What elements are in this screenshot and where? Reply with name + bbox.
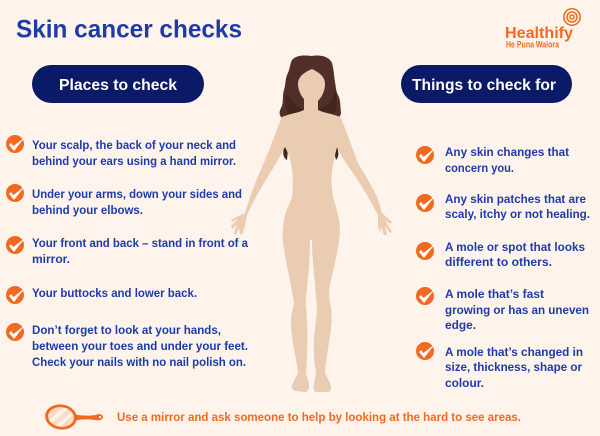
item: arms: Under your arms, down your sides and xyxy=(32,187,242,201)
item: arms: behind your elbows. xyxy=(32,203,143,217)
item: front and back xyxy=(6,236,248,266)
item: front and back: mirror. xyxy=(32,252,70,266)
item: hands and feet xyxy=(6,323,248,369)
item: scalp xyxy=(6,135,236,168)
item: fast growing mole: A mole that’s fast xyxy=(445,287,544,301)
item: changed mole: colour. xyxy=(445,376,484,390)
heading: places to check: Places to check xyxy=(59,77,177,94)
item: different mole: different to others. xyxy=(445,255,552,269)
face xyxy=(298,69,325,104)
body xyxy=(231,98,392,392)
hair xyxy=(280,55,341,118)
icon: hand mirror xyxy=(43,402,103,432)
item: fast growing mole xyxy=(416,287,589,332)
item: different mole: A mole or spot that looks xyxy=(445,240,585,254)
item: skin patches: scaly, itchy or not healing. xyxy=(445,207,590,221)
item: scalp: behind your ears using a hand mirror. xyxy=(32,154,236,168)
panel: places to check xyxy=(6,135,248,369)
item: arms xyxy=(6,184,242,217)
item: buttocks xyxy=(6,286,197,304)
item: hands and feet: between your toes and under your feet. xyxy=(32,339,248,353)
item: skin patches: Any skin patches that are xyxy=(445,192,586,206)
item: hands and feet: Check your nails with no nail polish on. xyxy=(32,355,246,369)
body figure xyxy=(231,55,392,392)
item: changed mole xyxy=(416,342,583,390)
logo: Healthify xyxy=(505,9,580,50)
underarm hair xyxy=(283,145,338,160)
logo: Healthify: He Puna Waiora xyxy=(506,40,560,50)
logo: Healthify: Healthify xyxy=(505,25,573,42)
item: changed mole: size, thickness, shape or xyxy=(445,360,582,374)
item: skin changes xyxy=(416,145,569,175)
item: different mole xyxy=(416,240,585,269)
item: skin patches xyxy=(416,192,590,221)
panel: things to check for xyxy=(416,145,590,390)
item: hands and feet: Don’t forget to look at your hands, xyxy=(32,323,221,337)
item: skin changes: concern you. xyxy=(445,161,514,175)
item: scalp: Your scalp, the back of your neck and xyxy=(32,138,236,152)
item: fast growing mole: edge. xyxy=(445,318,476,332)
item: front and back: Your front and back – stand in front of a xyxy=(32,236,248,250)
title: Skin cancer checks xyxy=(16,16,242,44)
heading: things to check for xyxy=(401,65,572,103)
heading: places to check xyxy=(32,65,204,103)
item: changed mole: A mole that’s changed in xyxy=(445,345,583,359)
item: skin changes: Any skin changes that xyxy=(445,145,569,159)
heading: things to check for: Things to check for xyxy=(412,77,556,94)
item: buttocks: Your buttocks and lower back. xyxy=(32,286,197,300)
item: fast growing mole: growing or has an uneven xyxy=(445,303,589,317)
callout: mirror tip: Use a mirror and ask someone to help by looking at the hard to see areas. xyxy=(117,410,521,424)
